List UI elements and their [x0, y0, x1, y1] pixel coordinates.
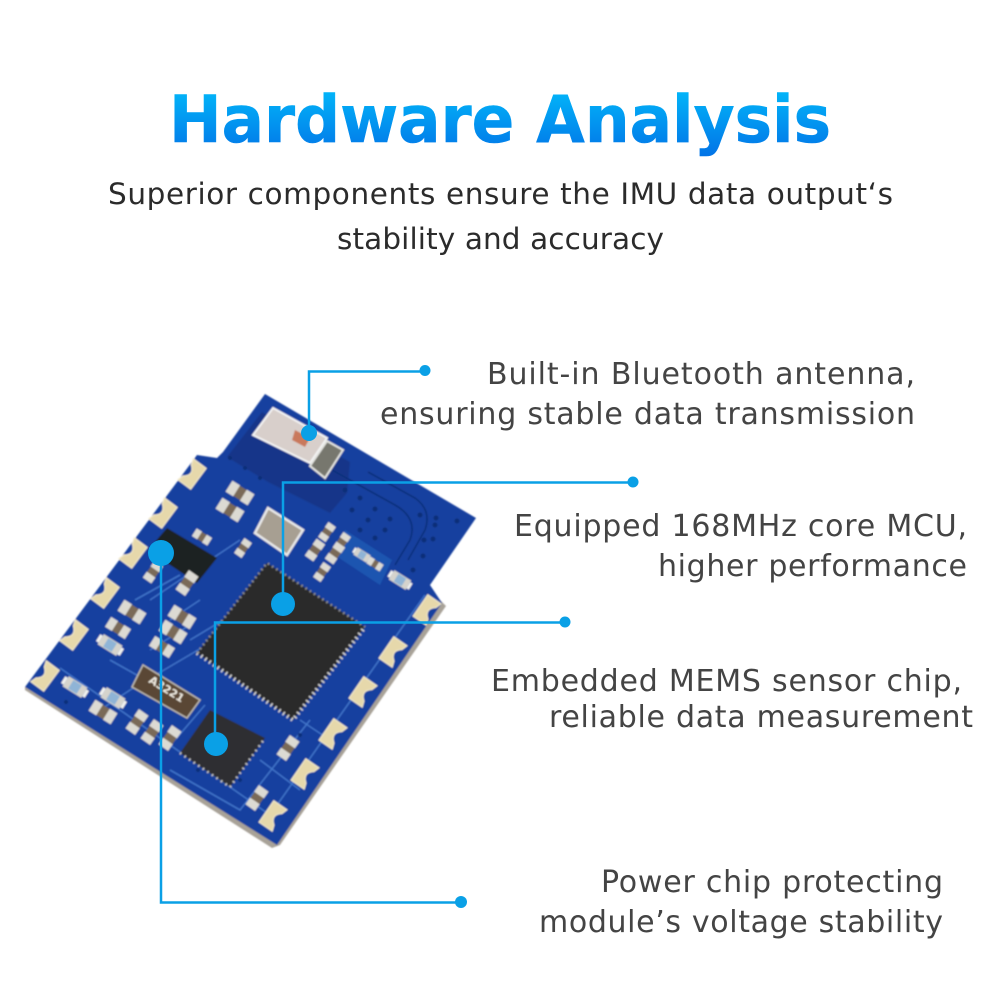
label: MCU: higher performance — [658, 549, 967, 584]
callout dots: MCU — [271, 476, 638, 616]
darker ground pour — [227, 412, 350, 513]
callout: power chip leader — [161, 553, 461, 902]
callout: antenna leader — [309, 372, 425, 433]
title: Hardware Analysis — [169, 83, 831, 158]
subtitle: stability and accuracy — [337, 222, 664, 256]
subtitle: Superior components ensure the IMU data output‘s — [108, 177, 893, 211]
circuit board module — [25, 394, 476, 848]
board body — [25, 394, 476, 845]
power chip — [148, 528, 217, 583]
castellated pads: right edge — [259, 595, 441, 831]
callout: MEMS leader — [215, 622, 565, 744]
antenna traces — [332, 470, 427, 565]
callout dots: MEMS — [204, 616, 570, 756]
label: power chip: Power chip protecting — [601, 865, 943, 900]
label: antenna — [380, 357, 915, 432]
antenna component — [253, 408, 327, 463]
label: MCU: Equipped 168MHz core MCU, — [514, 509, 967, 544]
MCU chip — [197, 563, 365, 720]
small passives — [60, 481, 414, 811]
subtitle — [108, 177, 893, 256]
label: antenna: Built-in Bluetooth antenna, — [487, 357, 915, 392]
callout dots: power chip — [148, 540, 467, 908]
brown ceramic component: A3221 — [146, 674, 186, 705]
MEMS chip — [180, 710, 265, 787]
brown ceramic component — [132, 665, 200, 718]
label: antenna: ensuring stable data transmission — [380, 397, 915, 432]
label: power chip: module’s voltage stability — [539, 905, 943, 940]
label: MEMS — [491, 664, 973, 735]
label: MCU — [514, 509, 967, 584]
crystal — [255, 508, 303, 555]
castellated pads: left edge — [31, 459, 206, 691]
label: power chip — [539, 865, 943, 940]
callout dots: antenna — [301, 365, 430, 441]
vias — [64, 456, 460, 782]
board side shadow — [25, 600, 446, 848]
callout: MCU leader — [283, 482, 633, 604]
label: MEMS: Embedded MEMS sensor chip, — [491, 664, 962, 699]
label: MEMS: reliable data measurement — [549, 700, 973, 735]
traces — [60, 540, 425, 815]
